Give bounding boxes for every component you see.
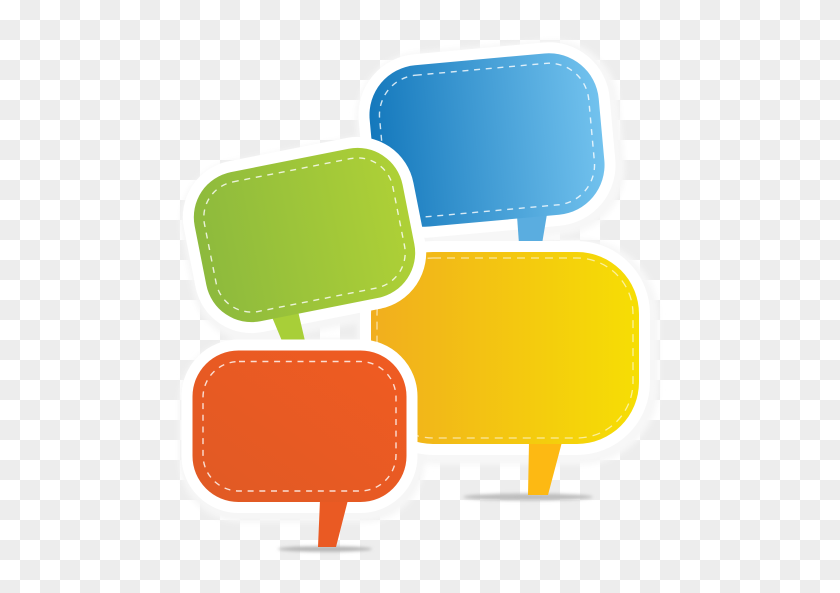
soft halos behind all bubbles bbox=[188, 53, 642, 507]
yellow bubble body bbox=[371, 252, 639, 444]
green halo bbox=[188, 144, 426, 335]
bubble: yellow bbox=[371, 252, 639, 495]
orange bubble stitching bbox=[203, 362, 396, 491]
green bubble body bbox=[186, 140, 423, 330]
orange white border bbox=[192, 350, 406, 502]
yellow halo bbox=[374, 256, 642, 448]
yellow bubble stitching bbox=[377, 258, 633, 438]
ground shadow: yellow bbox=[463, 494, 593, 500]
green bubble tail bbox=[272, 311, 305, 341]
yellow bubble tail bbox=[528, 442, 562, 495]
blue bubble tail bbox=[517, 214, 547, 244]
green white border bbox=[186, 140, 423, 330]
ground shadow: orange bbox=[278, 546, 372, 552]
bubble: orange bbox=[192, 350, 406, 547]
bubble: blue bbox=[365, 49, 609, 244]
blue halo bbox=[368, 53, 612, 235]
orange halo bbox=[195, 355, 409, 506]
orange bubble tail bbox=[318, 500, 348, 547]
blue white border bbox=[365, 49, 609, 231]
orange bubble body bbox=[192, 350, 406, 502]
yellow white border bbox=[371, 252, 639, 444]
blue bubble body bbox=[365, 49, 609, 231]
bubble: green bbox=[186, 140, 423, 341]
